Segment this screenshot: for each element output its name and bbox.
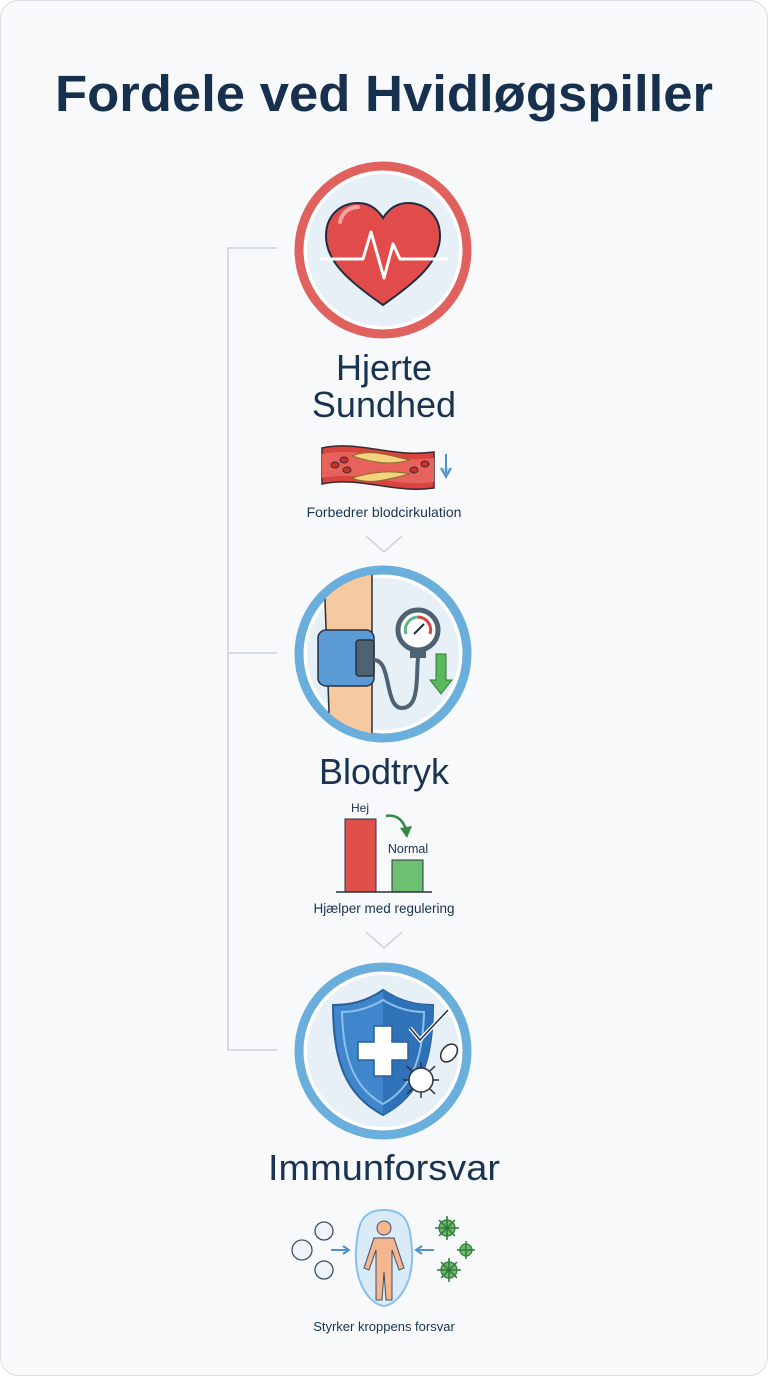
icon: blood pressure circle: [299, 570, 467, 740]
title: Fordele ved Hvidløgspiller: [55, 65, 713, 122]
arrow: chevron 2: [366, 932, 402, 948]
heading: Hjerte Sundhed: Sundhed: [312, 384, 456, 425]
bracket connector: [228, 248, 277, 1050]
chart: bar chart: Normal: [388, 842, 428, 856]
chart: bar chart: Hej: [351, 801, 369, 815]
caption: defense: Styrker kroppens forsvar: [313, 1319, 455, 1334]
caption: regulation: Hjælper med regulering: [313, 901, 455, 916]
icon: heart circle: [299, 166, 467, 334]
icon: immune shield circle: [299, 967, 467, 1135]
arrow: chevron 1: [366, 536, 402, 552]
heading: Hjerte Sundhed: [312, 347, 456, 425]
heading: Blodtryk: Blodtryk: [319, 751, 450, 792]
heading: Immunforsvar: Immunforsvar: [268, 1147, 500, 1188]
icon: artery: [322, 446, 451, 489]
heading: Hjerte Sundhed: Hjerte: [336, 347, 432, 388]
icon: body defense: [292, 1210, 475, 1306]
chart: bar chart: [336, 801, 432, 892]
caption: circulation: Forbedrer blodcirkulation: [307, 504, 461, 520]
